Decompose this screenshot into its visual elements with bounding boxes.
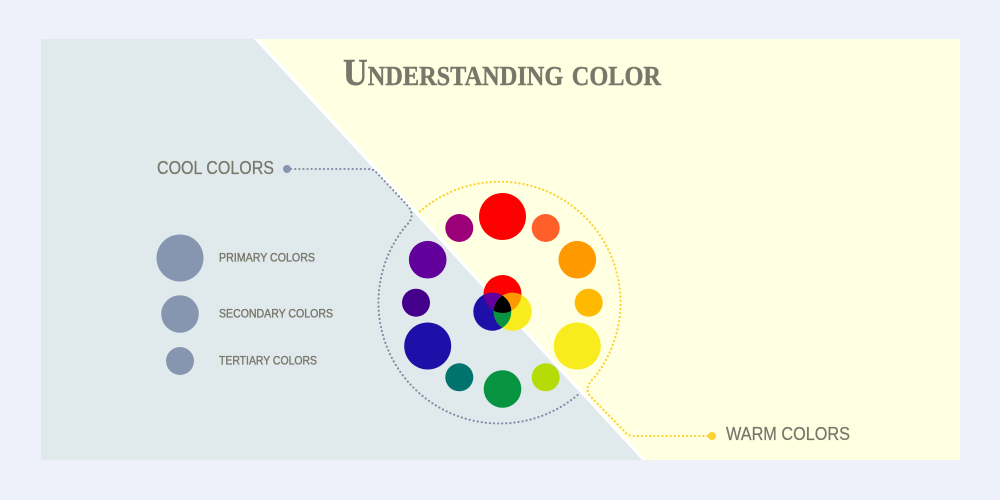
color wheel <box>402 193 603 408</box>
label: cool colors: COOL COLORS <box>157 157 274 178</box>
legend: tertiary colors <box>166 347 317 375</box>
cool colors leader line <box>283 165 580 424</box>
center color mix <box>473 275 532 331</box>
panel: warm colors <box>259 39 960 460</box>
yellow <box>554 322 601 370</box>
legend: primary colors: PRIMARY COLORS <box>219 252 315 264</box>
amber <box>575 289 603 317</box>
warm colors leader line <box>420 182 716 440</box>
legend: secondary colors <box>161 295 333 333</box>
indigo <box>402 289 430 317</box>
label: warm colors: WARM COLORS <box>726 423 850 444</box>
legend <box>156 234 333 375</box>
legend: secondary colors: SECONDARY COLORS <box>219 308 333 320</box>
title: Understanding color <box>343 52 661 94</box>
panel: cool colors <box>41 39 642 460</box>
legend: primary colors <box>156 234 315 282</box>
blue <box>404 322 451 370</box>
orange <box>558 241 596 278</box>
legend: tertiary colors: TERTIARY COLORS <box>219 356 317 368</box>
red-orange <box>532 214 560 242</box>
teal <box>445 363 473 391</box>
yellow-green <box>532 363 560 391</box>
red <box>479 193 526 240</box>
violet <box>409 241 447 278</box>
panel: backing white divider <box>41 39 960 460</box>
green <box>484 370 521 408</box>
magenta <box>445 214 473 242</box>
